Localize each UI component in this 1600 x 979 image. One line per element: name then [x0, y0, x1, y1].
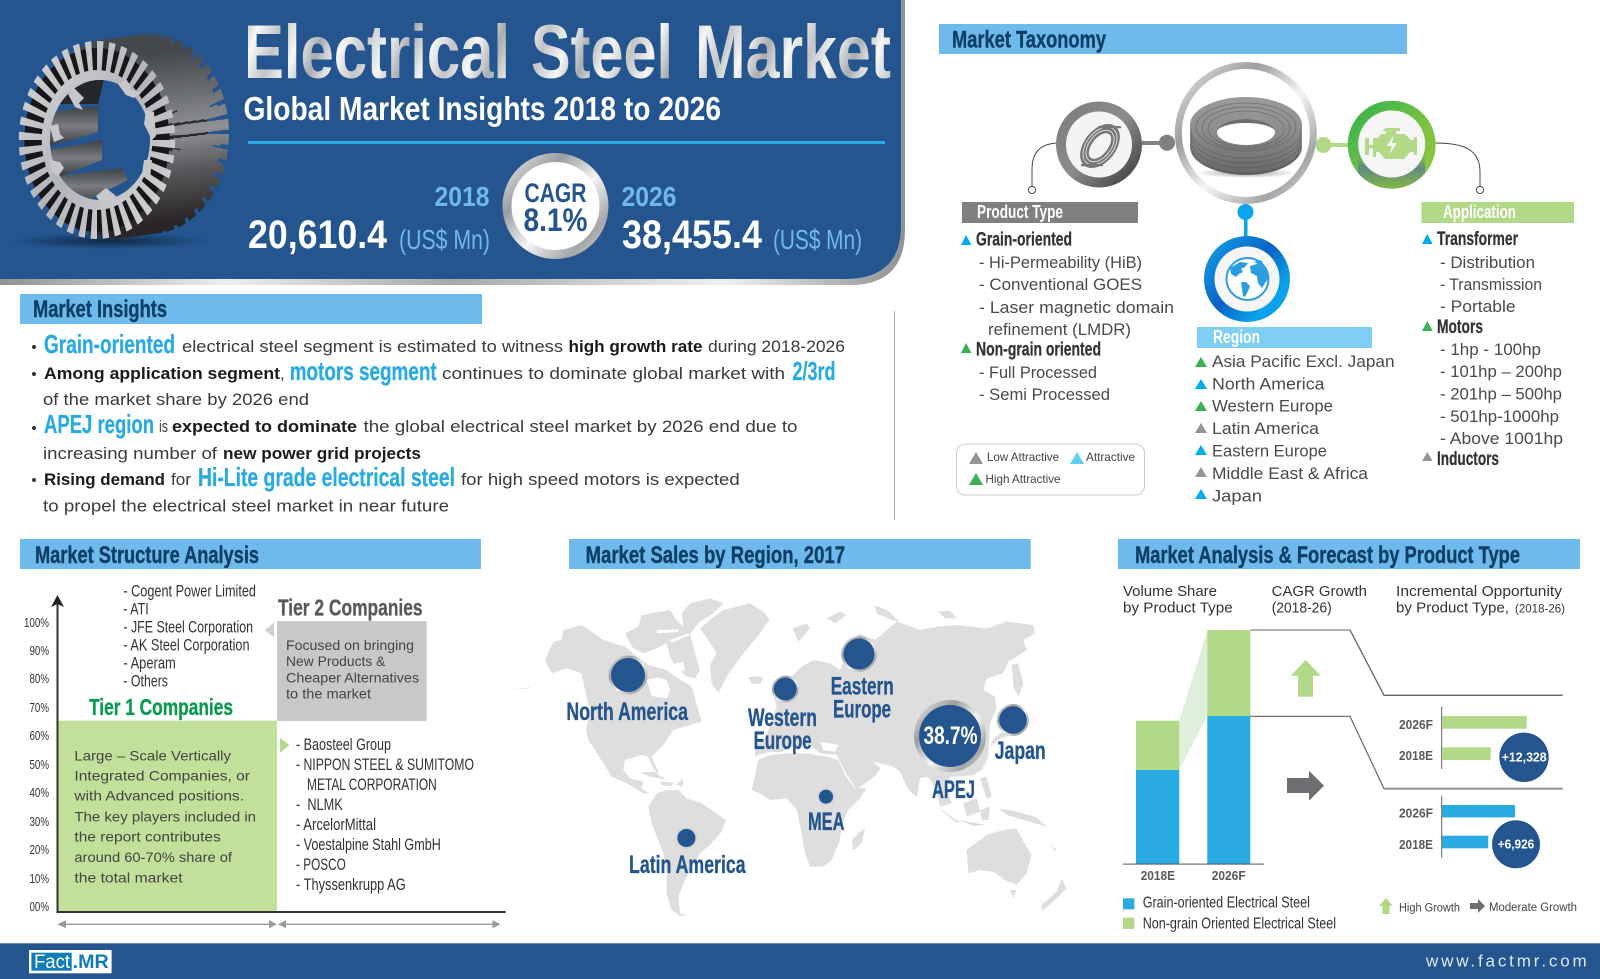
list: application: - Portable: [1440, 297, 1516, 316]
column headings: (2018-26): [1515, 604, 1565, 616]
tier 2 companies list: [296, 736, 474, 894]
column headings: by Product Type,: [1396, 601, 1509, 617]
CAGR badge: 8.1%: [524, 202, 588, 238]
insight text: for high speed motors is expected: [461, 470, 740, 489]
tier 2 companies list: - Baosteel Group: [296, 736, 391, 754]
2018 value: 2018: [434, 181, 490, 212]
list: product type: refinement (LMDR): [988, 320, 1131, 339]
title: Electrical: [244, 10, 510, 95]
column headings: by Product Type: [1123, 601, 1233, 617]
mini bars: non-grain oriented: [1399, 707, 1549, 782]
insight text: high growth rate: [568, 337, 702, 356]
y-axis labels: 70%: [30, 700, 49, 715]
insight text: [32, 329, 845, 516]
arrow: moderate growth: [1287, 771, 1324, 801]
region marker: japan: Japan: [995, 737, 1046, 765]
tier 2 companies list: - NIPPON STEEL & SUMITOMO: [296, 756, 474, 774]
list: application: - Transmission: [1440, 275, 1542, 294]
tag: application: Application: [1443, 202, 1516, 222]
legend: attractiveness: [956, 444, 1144, 495]
region marker: apej: 38.7%: [924, 722, 978, 750]
heading: market structure analysis: [20, 539, 481, 569]
column headings: Volume Share: [1123, 584, 1217, 600]
list: region: Japan: [1212, 486, 1262, 506]
logo: Fact.MR: [29, 950, 112, 973]
arrow: tier 2 pointer: [265, 623, 274, 637]
y-axis labels: 30%: [30, 814, 49, 829]
tier 1 companies list: - Cogent Power Limited: [123, 583, 256, 601]
tier 2 companies list: - POSCO: [296, 856, 346, 874]
region marker: eastern europe: Europe: [833, 696, 891, 724]
title: Steel: [531, 10, 673, 95]
list: product type: - Laser magnetic domain: [979, 298, 1174, 317]
arrow: high growth: [1291, 660, 1321, 697]
region marker: mea: MEA: [808, 808, 844, 836]
stacked bar 2018E: [1136, 721, 1179, 883]
panel: market sales by region: [512, 539, 1067, 916]
region marker: latin america: Latin America: [629, 851, 746, 879]
tier 2 block: to the market: [286, 685, 371, 701]
world map: americas: [512, 598, 769, 916]
subtitle: Global Market Insights 2018 to 2026: [244, 90, 721, 127]
insight text: Among application segment: [44, 364, 280, 383]
legend: attractiveness: Attractive: [1086, 450, 1135, 464]
tier 1 block: Integrated Companies, or: [74, 768, 250, 784]
region marker: eastern europe: [831, 636, 894, 724]
list: application: - 201hp – 500hp: [1440, 384, 1562, 404]
region marker: north america: North America: [566, 698, 689, 726]
insight text: for: [171, 470, 191, 489]
insight text: the global electrical steel market by 2026 end due to: [364, 417, 798, 436]
list: application: - 1hp - 100hp: [1440, 340, 1541, 359]
2026 value: 38,455.4: [622, 213, 763, 257]
legend: growth: High Growth: [1399, 903, 1460, 915]
panel: market insights: [20, 294, 845, 516]
insight text: APEJ region: [44, 409, 154, 439]
list: region: North America: [1212, 374, 1325, 394]
tier 1 block: Large – Scale Vertically: [74, 748, 231, 764]
legend: product type: Non-grain Oriented Electrical Steel: [1143, 915, 1336, 932]
tier 2 companies list: - Thyssenkrupp AG: [296, 876, 406, 894]
region marker: western europe: Europe: [754, 727, 812, 755]
tier 2 companies list: - Voestalpine Stahl GmbH: [296, 836, 441, 854]
stacked bar 2026F: 2026F: [1212, 868, 1246, 883]
mini bars: grain oriented: [1399, 796, 1540, 868]
insight text: electrical steel segment is estimated to witness: [182, 337, 563, 356]
region marker: western europe: Western: [748, 704, 817, 732]
tag: application: [1422, 202, 1574, 223]
icon: electrical steel stator core: [10, 46, 217, 249]
mini bars: non-grain oriented: 2026F: [1399, 717, 1433, 732]
legend: product type: Grain-oriented Electrical Steel: [1143, 894, 1310, 911]
arrows: horizontal range: [58, 920, 500, 928]
list: product type: - Hi-Permeability (HiB): [979, 253, 1142, 272]
tier 2 companies list: - ArcelorMittal: [296, 816, 376, 834]
tier 2 block: New Products &: [286, 653, 386, 669]
column headings: (2018-26): [1272, 601, 1332, 617]
list: region: Asia Pacific Excl. Japan: [1212, 352, 1394, 371]
tier 1 companies list: - ATI: [123, 601, 149, 619]
tier 1 block: the report contributes: [74, 829, 221, 845]
heading: market insights: Market Insights: [33, 296, 167, 323]
region marker: eastern europe: Eastern: [831, 672, 894, 700]
icon: product type coil: [1056, 102, 1142, 188]
list: application: [1422, 229, 1563, 470]
region marker: western europe: [748, 676, 817, 755]
list: application: - 101hp – 200hp: [1440, 362, 1562, 381]
legend: growth: [1379, 898, 1577, 915]
y-axis labels: [24, 615, 49, 914]
panel: market structure analysis: [20, 539, 506, 928]
list: region: Middle East & Africa: [1212, 464, 1369, 483]
list: application: Inductors: [1437, 449, 1499, 470]
icon: application engine: [1348, 101, 1436, 189]
y-axis labels: 90%: [30, 643, 49, 658]
insight text: Grain-oriented: [44, 329, 175, 359]
region marker: latin america: [629, 828, 746, 879]
insight text: is: [159, 417, 168, 436]
tier 1 block: The key players included in: [74, 808, 256, 824]
2018 value: 20,610.4: [248, 213, 388, 257]
axis chart frame: [51, 595, 506, 913]
logo: Fact.MR: Fact: [34, 952, 71, 973]
list: product type: - Conventional GOES: [979, 275, 1142, 294]
footer bar: [0, 943, 1600, 979]
heading: market taxonomy: [939, 24, 1407, 54]
tier 2 block: Cheaper Alternatives: [286, 669, 419, 685]
tier 1 block: the total market: [74, 869, 183, 885]
connector lines: [1028, 143, 1484, 194]
legend: attractiveness: High Attractive: [986, 472, 1061, 486]
insight text: 2/3rd: [792, 356, 836, 386]
heading: market sales by region: Market Sales by Region, 2017: [586, 542, 845, 569]
column headings: CAGR Growth: [1272, 584, 1367, 600]
CAGR badge: CAGR: [524, 178, 586, 208]
icon: region globe: [1204, 236, 1290, 322]
2018 value: (US$ Mn): [399, 224, 490, 255]
list: application: - Above 1001hp: [1440, 429, 1563, 448]
tag: product type: [962, 202, 1138, 223]
mini bars: grain oriented: +6,926: [1498, 838, 1534, 852]
tier 1 companies list: - JFE Steel Corporation: [123, 619, 253, 637]
2026 value: [622, 181, 862, 257]
list: application: - 501hp-1000hp: [1440, 407, 1559, 426]
region marker: mea: [808, 788, 844, 836]
tag: region: Region: [1213, 327, 1260, 347]
insight text: of the market share by 2026 end: [43, 390, 309, 409]
tier 2 block: [277, 621, 427, 721]
connector band: [1179, 630, 1207, 770]
region marker: north america: [566, 656, 689, 726]
tag: region: [1197, 327, 1372, 348]
list: product type: [961, 230, 1174, 404]
panel: market taxonomy: [939, 24, 1574, 506]
growth divider lines: [1250, 630, 1563, 789]
mini bars: grain oriented: 2018E: [1399, 837, 1433, 852]
tier 2 companies list: - NLMK: [296, 796, 343, 814]
y-axis labels: 60%: [30, 728, 49, 743]
logo: Fact.MR: .MR: [73, 952, 109, 973]
list: product type: Grain-oriented: [976, 230, 1072, 250]
insight text: increasing number of: [43, 444, 217, 463]
insight text: motors segment: [290, 356, 437, 386]
list: region: [1195, 352, 1394, 506]
list: product type: - Full Processed: [979, 363, 1097, 382]
tier 1 block: [58, 721, 277, 911]
legend: attractiveness: Low Attractive: [987, 450, 1059, 464]
heading: tier 1 companies: Tier 1 Companies: [89, 694, 233, 720]
insight text: new power grid projects: [223, 444, 421, 463]
y-axis labels: 00%: [30, 899, 49, 914]
y-axis labels: 10%: [30, 871, 49, 886]
list: region: Western Europe: [1212, 396, 1333, 416]
title: Market: [695, 10, 891, 95]
heading: market taxonomy: Market Taxonomy: [952, 26, 1106, 54]
tier 1 block: with Advanced positions.: [73, 788, 244, 804]
icon: coil center wire: [1142, 62, 1349, 238]
tier 1 companies list: - Aperam: [123, 655, 176, 673]
title: [244, 10, 891, 95]
tier 1 companies list: - Others: [123, 673, 168, 691]
y-axis labels: 40%: [30, 785, 49, 800]
heading: tier 2 companies: Tier 2 Companies: [278, 594, 423, 620]
header banner: [0, 0, 905, 285]
stacked bar 2026F: [1207, 630, 1250, 883]
tier 1 companies list: - AK Steel Corporation: [123, 637, 250, 655]
tier 2 companies list: METAL CORPORATION: [307, 776, 437, 794]
insight text: ,: [280, 364, 285, 383]
insight text: continues to dominate global market with: [442, 364, 785, 383]
stacked bar 2018E: 2018E: [1141, 868, 1175, 883]
tag: product type: Product Type: [977, 202, 1063, 222]
legend: growth: Moderate Growth: [1489, 902, 1577, 914]
list: product type: - Semi Processed: [979, 385, 1110, 404]
website: www.factmr.com: [1425, 952, 1587, 971]
world map: eurasia africa oceania: [752, 605, 1067, 912]
y-axis labels: 100%: [24, 615, 49, 630]
CAGR badge: [502, 153, 608, 259]
column headings: Incremental Opportunity: [1396, 584, 1563, 600]
list: region: Latin America: [1212, 419, 1320, 438]
list: application: Motors: [1437, 317, 1483, 338]
mini bars: non-grain oriented: 2018E: [1399, 748, 1433, 763]
2018 value: [248, 181, 490, 257]
list: product type: Non-grain oriented: [976, 340, 1101, 360]
list: application: Transformer: [1437, 229, 1518, 250]
heading: market structure analysis: Market Structure Analysis: [35, 542, 259, 569]
insight text: Rising demand: [44, 470, 165, 489]
y-axis labels: 50%: [30, 757, 49, 772]
insight text: to propel the electrical steel market in near future: [43, 497, 449, 516]
mini bars: grain oriented: 2026F: [1399, 806, 1433, 821]
insight text: Hi-Lite grade electrical steel: [198, 462, 455, 492]
column headings: [1123, 584, 1565, 617]
2026 value: 2026: [622, 181, 676, 212]
insight text: during 2018-2026: [708, 337, 845, 356]
mini bars: non-grain oriented: +12,328: [1502, 750, 1547, 764]
tier 2 block: Focused on bringing: [286, 637, 414, 653]
list: region: Eastern Europe: [1212, 442, 1327, 460]
arrow: tier 1 pointer: [280, 738, 289, 753]
y-axis labels: 20%: [30, 842, 49, 857]
legend: product type: [1123, 894, 1336, 932]
region marker: japan: [995, 704, 1046, 765]
heading: market insights: [20, 294, 482, 324]
panel: market analysis and forecast: [1118, 539, 1580, 932]
region marker: apej: [914, 700, 986, 804]
2026 value: (US$ Mn): [773, 224, 862, 255]
y-axis labels: 80%: [30, 671, 49, 686]
insight text: expected to dominate: [172, 417, 357, 436]
region marker: apej: APEJ: [932, 776, 975, 804]
tier 1 companies list: [123, 583, 256, 691]
list: application: - Distribution: [1440, 253, 1535, 272]
heading: market sales by region: [569, 539, 1031, 569]
tier 1 block: around 60-70% share of: [74, 849, 232, 865]
